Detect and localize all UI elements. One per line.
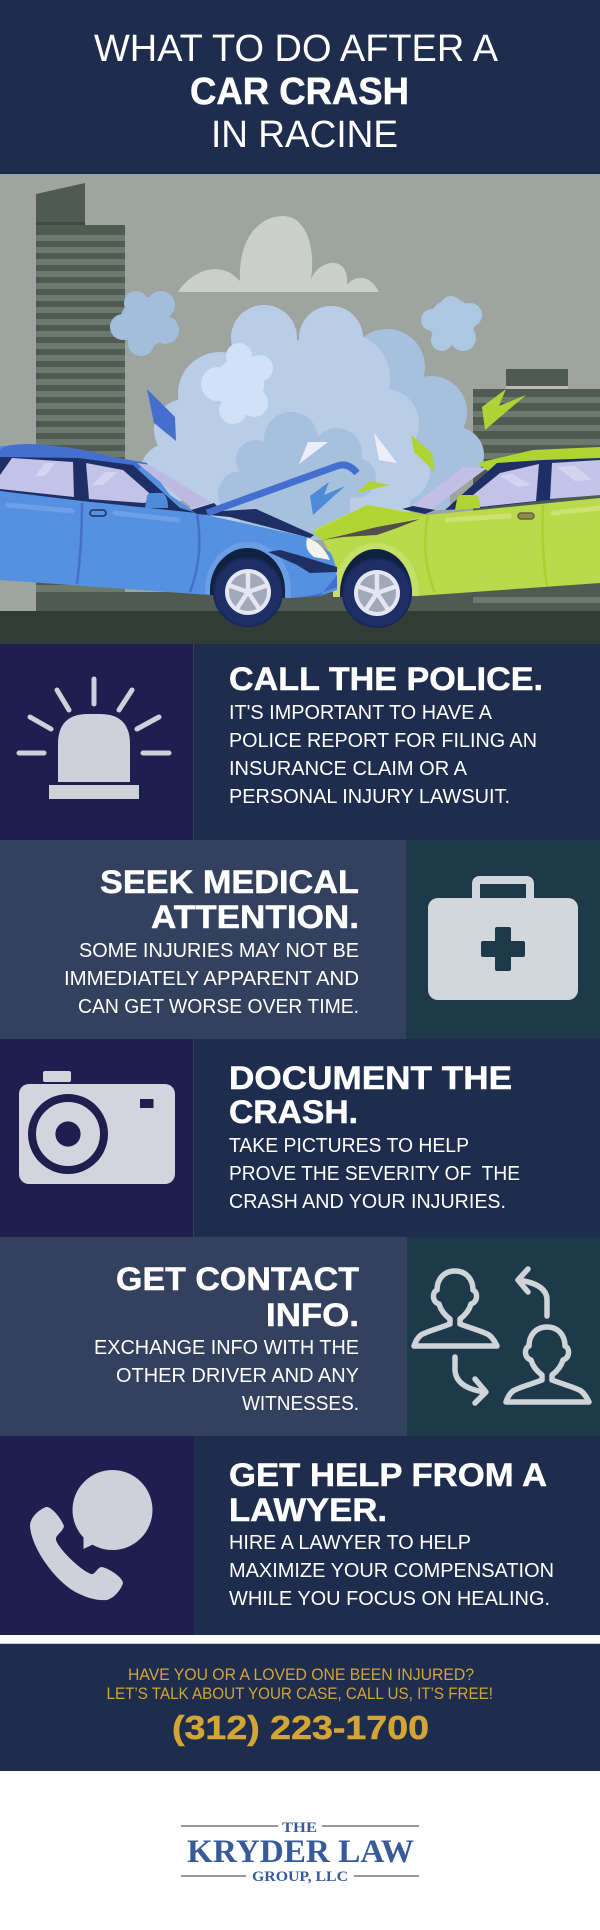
body text: WITNESSES. xyxy=(242,1393,359,1415)
panel: call to action: (312) 223-1700 xyxy=(172,1709,429,1746)
icon: two people exchanging info xyxy=(414,1269,589,1403)
panel: title header: CAR CRASH xyxy=(190,71,409,113)
panel: get help from a lawyer xyxy=(0,1436,600,1635)
heading xyxy=(100,864,359,935)
body text xyxy=(229,1135,520,1213)
panel: title header: IN RACINE xyxy=(211,114,398,156)
icon: siren xyxy=(19,679,169,799)
body text: TAKE PICTURES TO HELP xyxy=(229,1135,469,1157)
body text: IT'S IMPORTANT TO HAVE A xyxy=(229,702,493,724)
body text: CAN GET WORSE OVER TIME. xyxy=(78,996,359,1018)
building: left tower xyxy=(36,183,125,592)
body text xyxy=(229,702,537,808)
cloud xyxy=(178,216,379,292)
panel: call the police xyxy=(0,644,600,840)
body text: HIRE A LAWYER TO HELP xyxy=(229,1532,471,1554)
smoke: back cloud xyxy=(349,329,484,510)
heading: CRASH. xyxy=(229,1094,358,1130)
heading: INFO. xyxy=(266,1297,359,1333)
logo: the kryder law group: KRYDER LAW xyxy=(187,1834,414,1870)
logo: the kryder law group xyxy=(181,1820,419,1885)
body text xyxy=(229,1532,554,1610)
smoke puff: left xyxy=(110,291,179,356)
heading: ATTENTION. xyxy=(151,899,359,935)
panel: title header xyxy=(0,0,600,174)
panel: call to action xyxy=(0,1643,600,1771)
body text: SOME INJURIES MAY NOT BE xyxy=(79,940,359,962)
wheel: green car xyxy=(343,559,411,627)
panel: title header: WHAT TO DO AFTER A xyxy=(94,28,499,70)
body text: IMMEDIATELY APPARENT AND xyxy=(64,968,359,990)
icon: first aid kit xyxy=(428,880,578,1000)
body text: MAXIMIZE YOUR COMPENSATION xyxy=(229,1560,554,1582)
wheel: blue car xyxy=(214,558,282,626)
smoke: main cloud xyxy=(140,305,430,530)
ground xyxy=(0,592,600,644)
panel: seek medical attention xyxy=(0,840,600,1039)
logo: the kryder law group: GROUP, LLC xyxy=(252,1869,348,1885)
building: right tower xyxy=(473,369,600,592)
body text: INSURANCE CLAIM OR A xyxy=(229,758,468,780)
body text: PROVE THE SEVERITY OF THE xyxy=(229,1163,520,1185)
heading xyxy=(229,1060,512,1130)
heading xyxy=(229,1457,547,1528)
body text xyxy=(64,940,359,1018)
smoke: light puff xyxy=(201,343,273,424)
heading xyxy=(116,1261,359,1333)
body text: PERSONAL INJURY LAWSUIT. xyxy=(229,786,510,808)
heading: LAWYER. xyxy=(229,1492,387,1528)
icon: camera xyxy=(19,1071,175,1184)
car: green xyxy=(313,447,600,597)
body text: OTHER DRIVER AND ANY xyxy=(116,1365,359,1387)
smoke: front cloud xyxy=(218,412,376,540)
body text: CRASH AND YOUR INJURIES. xyxy=(229,1191,506,1213)
logo: the kryder law group: THE xyxy=(282,1820,317,1836)
body text: POLICE REPORT FOR FILING AN xyxy=(229,730,537,752)
icon: phone and speech bubble xyxy=(30,1470,152,1600)
panel: document the crash xyxy=(0,1039,600,1237)
smoke puff: right xyxy=(421,296,482,351)
debris shards xyxy=(147,389,526,515)
illustration: car crash scene xyxy=(0,174,600,644)
body text xyxy=(94,1337,359,1415)
heading: GET CONTACT xyxy=(116,1261,359,1297)
heading: SEEK MEDICAL xyxy=(100,864,359,900)
heading: GET HELP FROM A xyxy=(229,1457,547,1493)
body text: WHILE YOU FOCUS ON HEALING. xyxy=(229,1588,550,1610)
panel: call to action: LET’S TALK ABOUT YOUR CASE, CALL US, IT’S FREE! xyxy=(106,1684,493,1703)
panel: call to action: HAVE YOU OR A LOVED ONE BEEN INJURED? xyxy=(128,1665,474,1684)
body text: EXCHANGE INFO WITH THE xyxy=(94,1337,359,1359)
panel: get contact info xyxy=(0,1237,600,1436)
heading: DOCUMENT THE xyxy=(229,1060,512,1096)
car: blue xyxy=(0,444,357,598)
heading: CALL THE POLICE. xyxy=(229,661,543,697)
